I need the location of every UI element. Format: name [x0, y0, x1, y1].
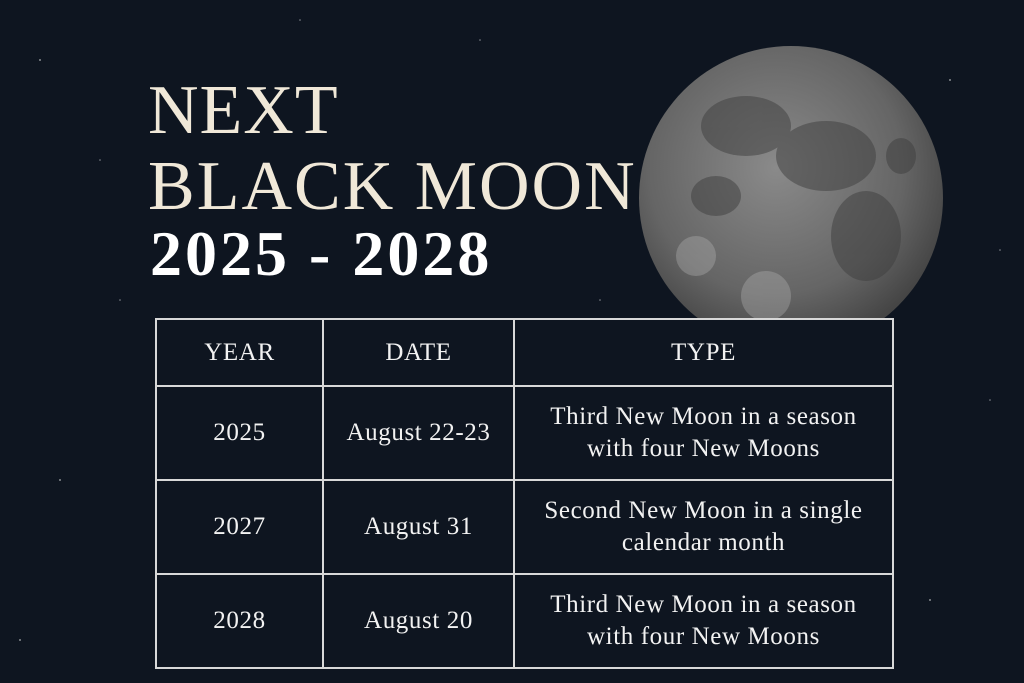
table: Third New Moon in a season: [550, 591, 857, 618]
table: with four New Moons: [587, 623, 820, 650]
table: 2025: [213, 419, 266, 446]
text: BLACK MOON: [148, 148, 637, 225]
table: August 22-23: [346, 419, 490, 446]
table: calendar month: [622, 529, 785, 556]
moon: [639, 46, 943, 318]
table: Second New Moon in a single: [544, 497, 863, 524]
table: 2028: [213, 607, 266, 634]
table: with four New Moons: [587, 435, 820, 462]
table: Third New Moon in a season: [550, 403, 857, 430]
title: [148, 72, 637, 289]
table: 2027: [213, 513, 266, 540]
table: August 31: [364, 513, 473, 540]
text: NEXT: [148, 72, 339, 149]
table: [155, 318, 894, 669]
table: TYPE: [671, 338, 736, 366]
table: DATE: [385, 338, 452, 366]
table: August 20: [364, 607, 473, 634]
text: 2025 - 2028: [150, 218, 492, 289]
table: YEAR: [204, 338, 275, 366]
